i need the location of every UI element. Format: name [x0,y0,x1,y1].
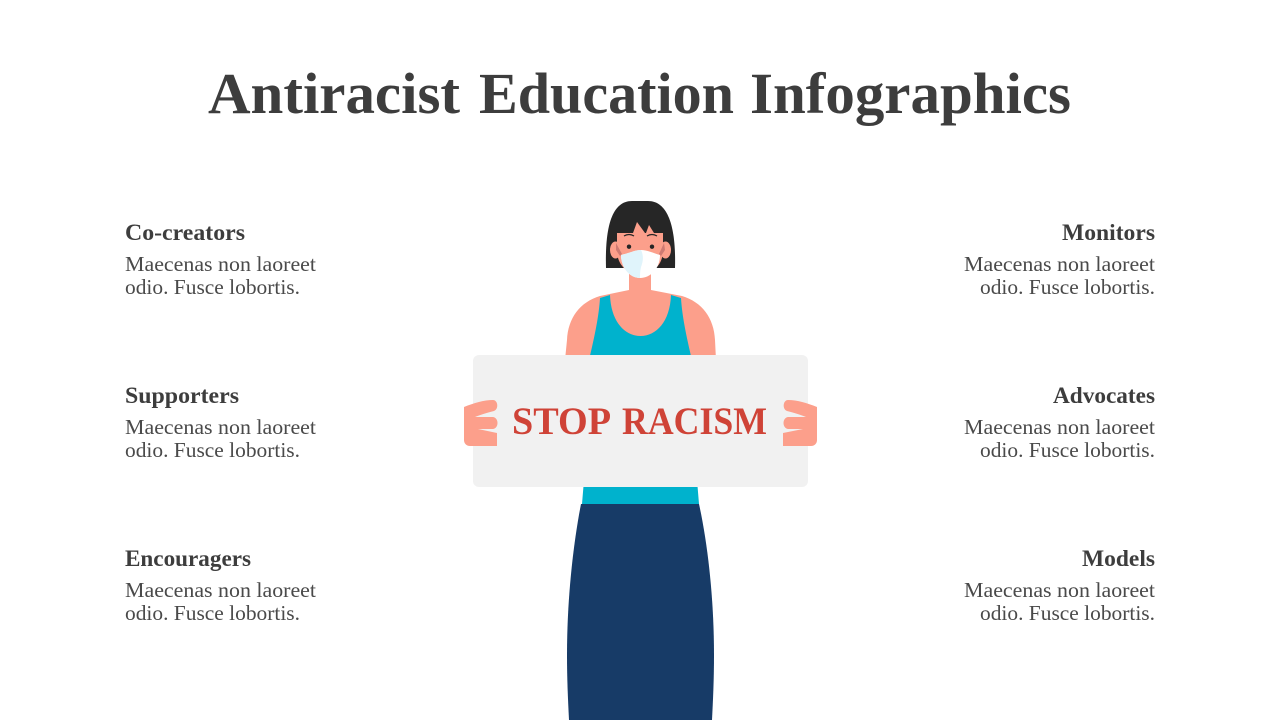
top lower part [582,480,699,504]
sign board [473,355,808,487]
neck [629,262,651,294]
title: Infographics [750,61,1071,126]
text block: Monitors: Monitors [1062,220,1155,245]
text block: Models: odio. Fusce lobortis. [980,601,1155,625]
text block: Advocates [964,383,1155,462]
ear right [660,242,671,258]
eyes [627,244,631,249]
text block: Supporters: Maecenas non laoreet [125,415,316,439]
text block: Co-creators: odio. Fusce lobortis. [125,275,300,299]
hair [606,201,675,268]
shoulders and arms [565,270,716,360]
sign text: RACISM [622,400,767,443]
title: Antiracist [208,61,461,126]
text block: Models: Models [1082,546,1155,571]
mask straps [616,243,665,256]
text block: Models: Maecenas non laoreet [964,578,1155,602]
left hand [464,400,498,446]
text block: Supporters: odio. Fusce lobortis. [125,438,300,462]
text block: Co-creators [125,220,316,299]
eyebrows [624,234,657,236]
text block: Co-creators: Co-creators [125,220,245,245]
right hand [783,400,817,446]
text block: Encouragers: Encouragers [125,546,251,571]
text block: Monitors [964,220,1155,299]
mask shade [621,250,643,278]
text block: Supporters [125,383,316,462]
face mask [621,250,660,278]
text block: Monitors: Maecenas non laoreet [964,252,1155,276]
face [617,222,663,274]
text block: Co-creators: Maecenas non laoreet [125,252,316,276]
text block: Supporters: Supporters [125,383,239,408]
skirt [567,504,714,720]
illustration: woman holding sign [565,201,716,720]
text block: Encouragers [125,546,316,625]
sign text: STOP [512,400,610,443]
text block: Encouragers: odio. Fusce lobortis. [125,601,300,625]
text block: Advocates: odio. Fusce lobortis. [980,438,1155,462]
text block: Advocates: Maecenas non laoreet [964,415,1155,439]
text block: Models [964,546,1155,625]
text block: Advocates: Advocates [1053,383,1155,408]
tank top [589,295,692,360]
ear left [610,242,621,258]
text block: Monitors: odio. Fusce lobortis. [980,275,1155,299]
text block: Encouragers: Maecenas non laoreet [125,578,316,602]
title: Education [479,61,734,126]
